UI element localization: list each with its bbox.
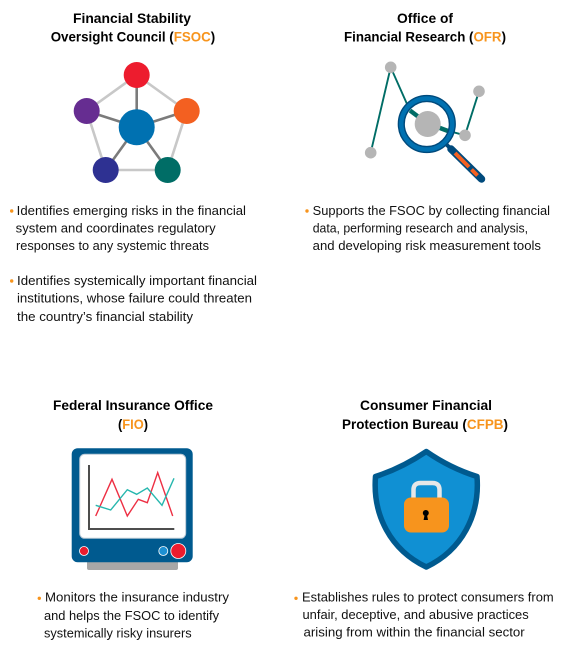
- icon: magnifying glass over line chart: [365, 62, 485, 179]
- bullet text: emerging risks: responses to any systemic threats: [16, 238, 209, 253]
- bullet text: important institutions: Identifies systemically important financial: [17, 273, 257, 288]
- bullet text: emerging risks: system and coordinates regulatory: [16, 221, 216, 236]
- bullet text: important institutions: [10, 273, 257, 324]
- bullet text: important institutions: the country’s financial stability: [17, 309, 194, 324]
- bullet text: establishes rules: [294, 590, 554, 640]
- bullet text: supports the FSOC: and developing risk measurement tools: [313, 238, 541, 253]
- heading: FSOC: [51, 11, 215, 45]
- heading: FSOC: Oversight Council (FSOC): [51, 30, 215, 45]
- bullet text: supports the FSOC: [305, 203, 550, 253]
- panel: CFPB: [294, 398, 554, 640]
- bullet text: establishes rules: arising from within the financial sector: [304, 625, 525, 640]
- panel: FIO: [38, 398, 230, 640]
- panel: FSOC: [10, 11, 257, 324]
- bullet text: monitors insurance: systemically risky insurers: [44, 625, 192, 640]
- bullet text: emerging risks: [10, 203, 246, 253]
- icon: monitor with line chart: [72, 448, 193, 570]
- heading: OFR: [344, 11, 506, 45]
- icon: network pentagon: [74, 62, 200, 183]
- heading: FIO: [53, 398, 213, 432]
- panel: OFR: [305, 11, 550, 253]
- heading: CFPB: Protection Bureau (CFPB): [342, 417, 508, 432]
- bullet text: supports the FSOC: data, performing research and analysis,: [313, 221, 528, 236]
- heading: CFPB: [342, 398, 508, 432]
- heading: OFR: Office of: [397, 11, 454, 26]
- icon: shield with padlock: [375, 452, 477, 567]
- bullet text: supports the FSOC: Supports the FSOC by collecting financial: [313, 203, 550, 218]
- bullet text: establishes rules: Establishes rules to protect consumers from: [302, 590, 554, 605]
- heading: CFPB: Consumer Financial: [360, 398, 492, 413]
- bullet text: important institutions: institutions, whose failure could threaten: [17, 291, 252, 306]
- heading: FIO: (FIO): [118, 417, 148, 432]
- bullet text: monitors insurance: [38, 590, 230, 640]
- bullet text: establishes rules: unfair, deceptive, and abusive practices: [302, 607, 529, 622]
- heading: FSOC: Financial Stability: [73, 11, 192, 26]
- bullet text: monitors insurance: and helps the FSOC to identify: [44, 608, 220, 623]
- heading: OFR: Financial Research (OFR): [344, 30, 506, 45]
- bullet text: monitors insurance: Monitors the insurance industry: [45, 590, 230, 605]
- bullet text: emerging risks: Identifies emerging risks in the financial: [17, 203, 246, 218]
- heading: FIO: Federal Insurance Office: [53, 398, 213, 413]
